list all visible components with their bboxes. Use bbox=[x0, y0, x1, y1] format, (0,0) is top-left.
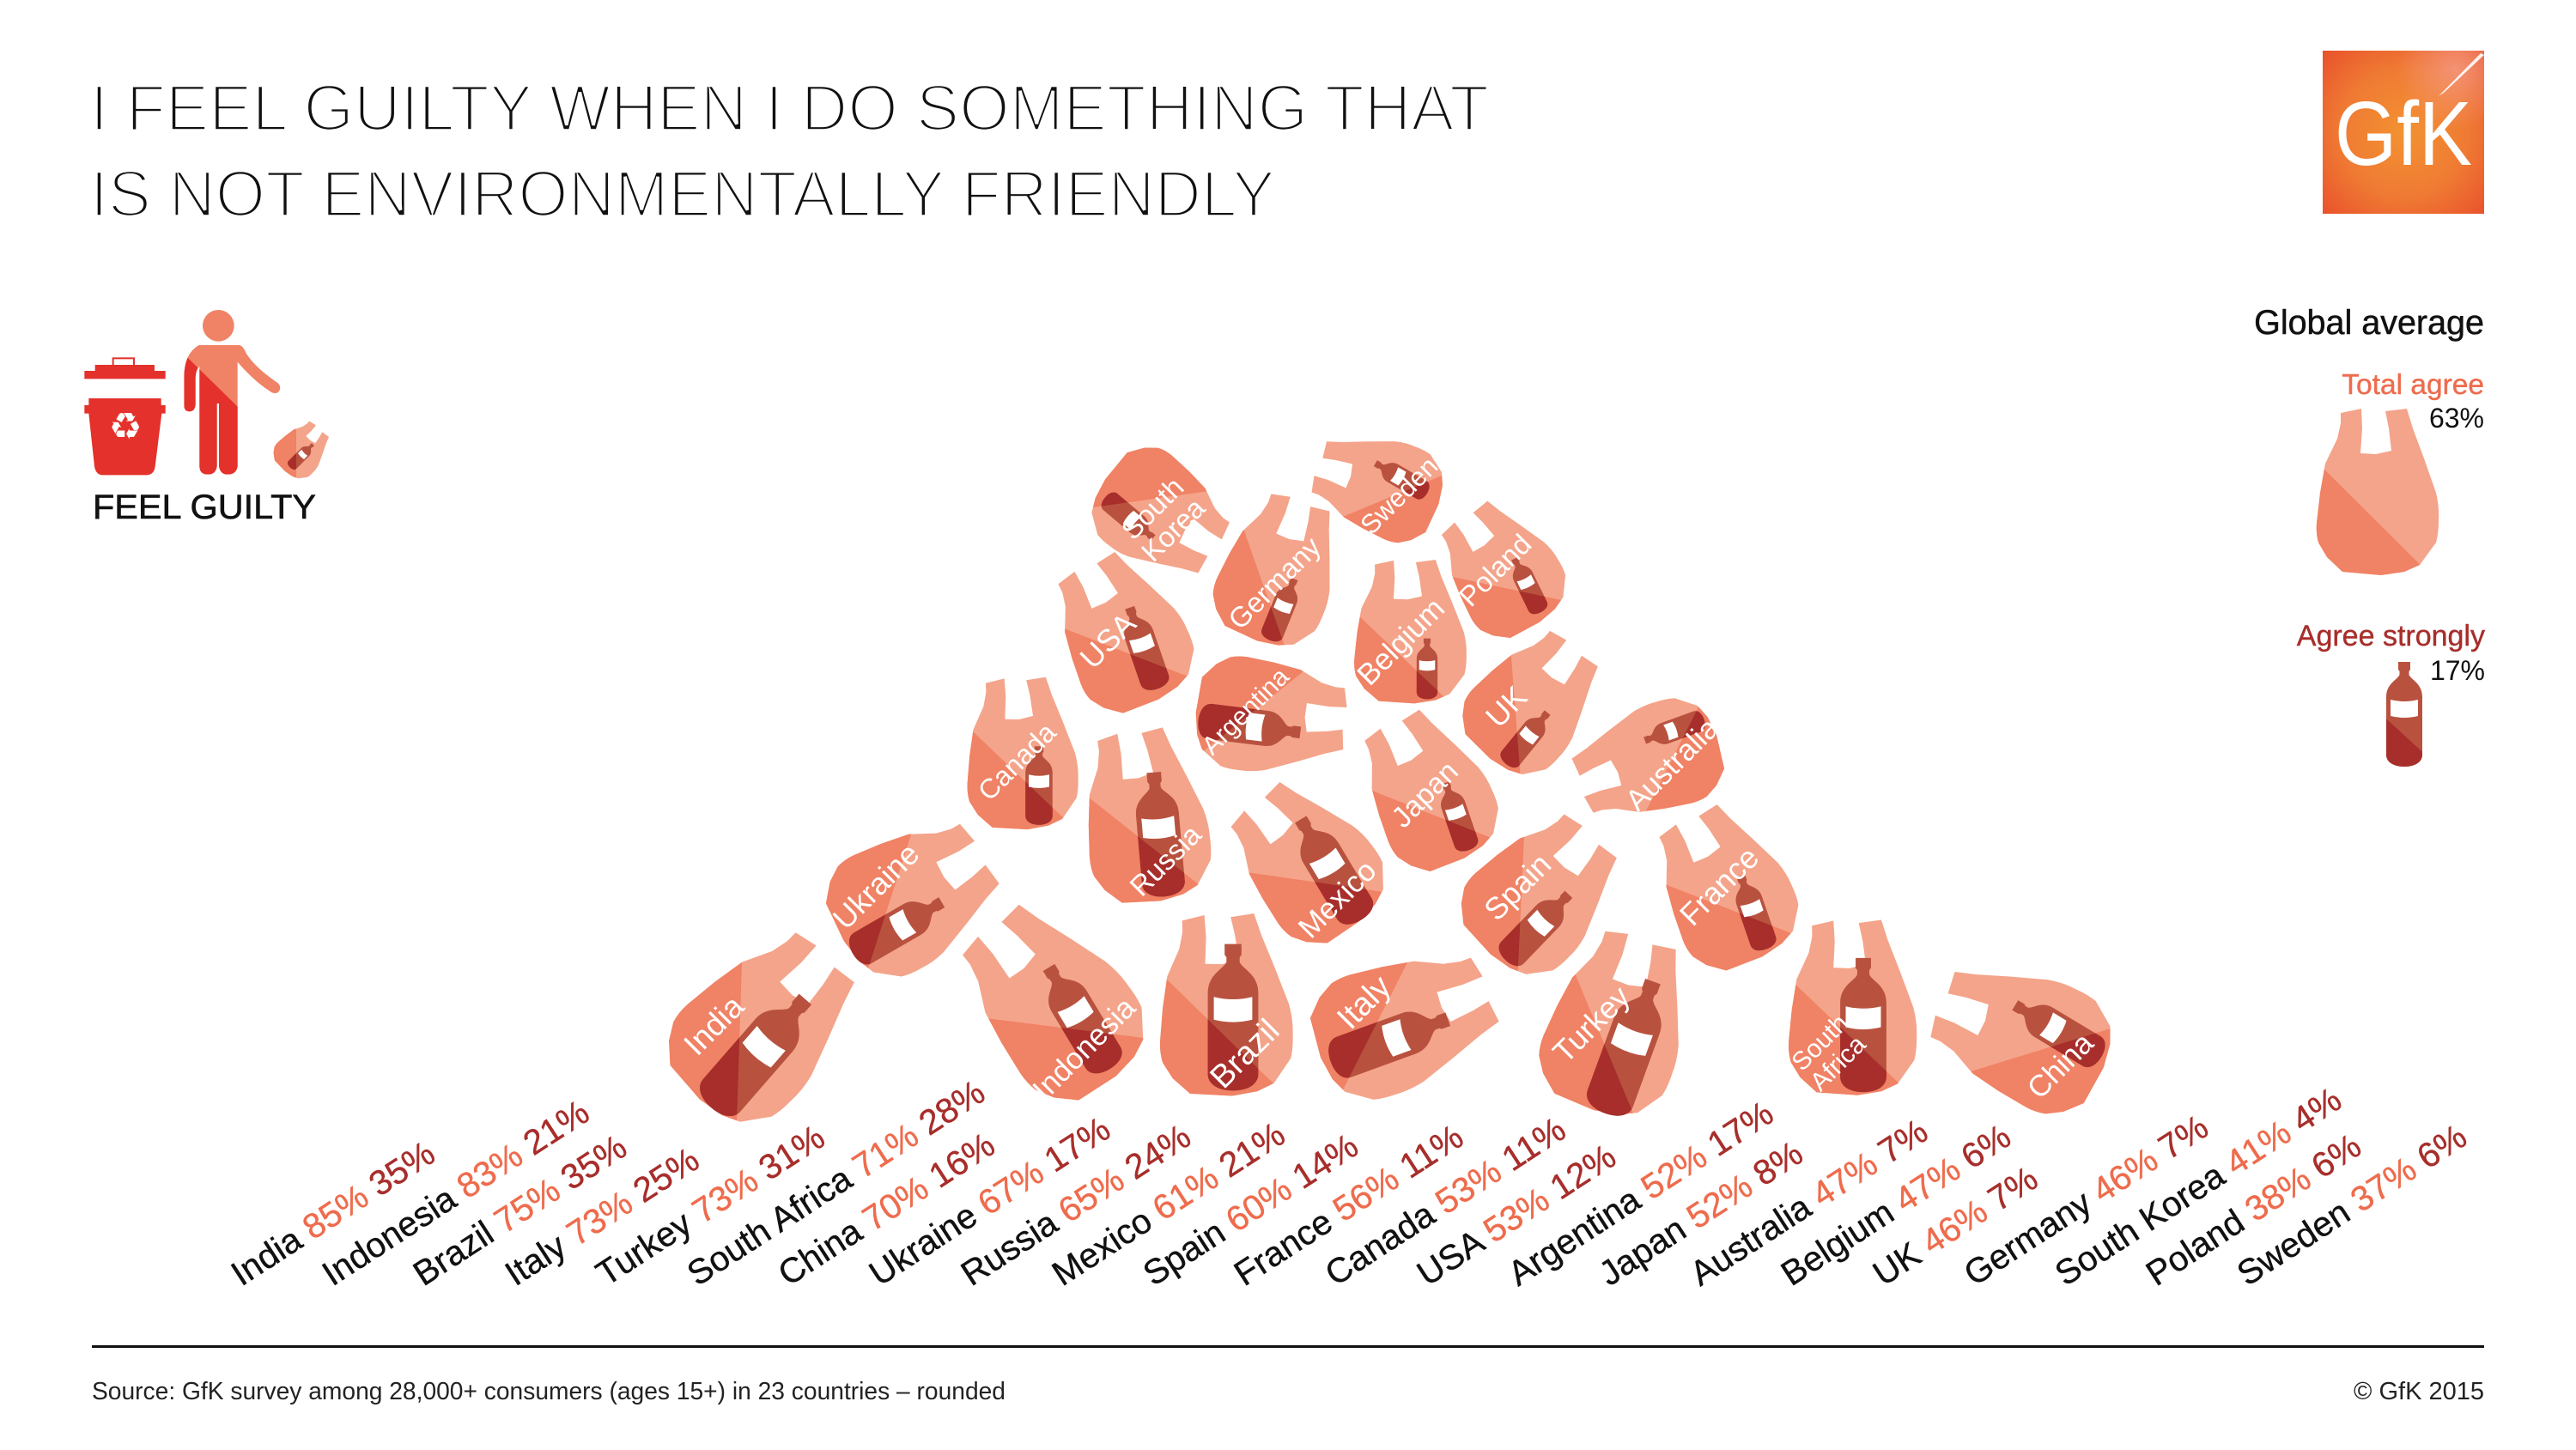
bag: China: China bbox=[2020, 1026, 2100, 1106]
bag: Turkey bbox=[1539, 931, 1679, 1116]
bag: France bbox=[1659, 804, 1798, 970]
bag: China bbox=[1930, 972, 2111, 1114]
row: Australia: Australia 47% 7% bbox=[1683, 1111, 1935, 1294]
bag: Russia: Russia bbox=[1123, 818, 1207, 902]
title: I FEEL GUILTY WHEN I DO SOMETHING THAT bbox=[90, 72, 1489, 145]
title bbox=[90, 72, 1489, 231]
row: UK: UK 46% 7% bbox=[1866, 1158, 2044, 1294]
row: Italy: Italy 73% 25% bbox=[498, 1139, 706, 1294]
bag: Argentina: Argentina bbox=[1197, 662, 1295, 761]
icon: recycling bin bbox=[84, 358, 166, 475]
legend: bottle icon bbox=[2386, 662, 2422, 767]
bag: India: India bbox=[677, 988, 750, 1062]
row: Sweden: Sweden 37% 6% bbox=[2230, 1116, 2474, 1294]
legend: agree strongly value: 17% bbox=[2430, 655, 2485, 686]
bag: Russia bbox=[1089, 727, 1211, 903]
bag: Brazil: Brazil bbox=[1203, 1012, 1286, 1095]
bag: Spain: Spain bbox=[1477, 846, 1558, 927]
row: Argentina: Argentina 52% 17% bbox=[1501, 1093, 1780, 1294]
copyright: © GfK 2015 bbox=[2354, 1378, 2484, 1405]
bag: South Korea: Korea bbox=[1135, 491, 1212, 567]
bag: Canada: Canada bbox=[972, 717, 1062, 807]
bag: South Africa bbox=[1788, 920, 1917, 1095]
bag: Ukraine: Ukraine bbox=[826, 836, 926, 936]
row: Ukraine: Ukraine 67% 17% bbox=[862, 1108, 1117, 1294]
icon: person throwing bag beside recycling bin bbox=[84, 310, 329, 479]
row: Mexico: Mexico 61% 21% bbox=[1045, 1114, 1291, 1294]
bag: Mexico: Mexico bbox=[1292, 854, 1383, 945]
row: South Korea: South Korea 41% 4% bbox=[2048, 1079, 2348, 1294]
bag: Indonesia bbox=[963, 905, 1144, 1101]
bag: Mexico bbox=[1231, 782, 1383, 943]
icon: person bbox=[184, 310, 280, 475]
icon: recycling bin: ♻ bbox=[109, 406, 142, 449]
icon: small bag with bottle bbox=[273, 421, 329, 479]
bag: USA: USA bbox=[1072, 605, 1143, 676]
bag: Japan bbox=[1364, 709, 1498, 871]
bag: India bbox=[669, 932, 854, 1122]
bag: Italy: Italy bbox=[1330, 968, 1398, 1036]
bag: Turkey: Turkey bbox=[1546, 979, 1637, 1070]
bag: Japan: Japan bbox=[1385, 755, 1465, 834]
bag: Germany bbox=[1212, 494, 1330, 646]
bag: UK: UK bbox=[1479, 679, 1534, 734]
row: Russia: Russia 65% 24% bbox=[954, 1116, 1198, 1294]
row: France: France 56% 11% bbox=[1227, 1116, 1470, 1294]
bag: Belgium bbox=[1354, 560, 1467, 704]
bag: Brazil bbox=[1159, 913, 1293, 1095]
bag: Sweden: Sweden bbox=[1354, 451, 1443, 540]
row: USA: USA 53% 12% bbox=[1410, 1136, 1623, 1294]
bag: Sweden bbox=[1312, 441, 1443, 543]
row: South Africa: South Africa 71% 28% bbox=[680, 1071, 992, 1294]
bag: South Korea bbox=[1091, 448, 1230, 573]
bag: Germany: Germany bbox=[1222, 531, 1327, 635]
bag: Spain bbox=[1461, 814, 1617, 974]
title: IS NOT ENVIRONMENTALLY FRIENDLY bbox=[90, 158, 1275, 231]
legend: total agree value: 63% bbox=[2429, 403, 2484, 434]
bag: France: France bbox=[1673, 840, 1765, 932]
row: Belgium: Belgium 47% 6% bbox=[1774, 1116, 2018, 1294]
legend heading: Global average bbox=[2254, 304, 2484, 342]
row: India: India 85% 35% bbox=[224, 1133, 441, 1294]
bag: Australia: Australia bbox=[1619, 711, 1726, 817]
bag: South Africa: Africa bbox=[1805, 1030, 1872, 1096]
row: Spain: Spain 60% 14% bbox=[1136, 1125, 1365, 1294]
row: China: China 70% 16% bbox=[771, 1125, 1002, 1294]
bag: Poland: Poland bbox=[1453, 528, 1537, 612]
row: Poland: Poland 38% 6% bbox=[2139, 1125, 2368, 1294]
row: Turkey: Turkey 73% 31% bbox=[589, 1117, 831, 1294]
bag: Indonesia: Indonesia bbox=[1026, 991, 1142, 1107]
country percentages list bbox=[224, 1071, 2474, 1294]
legend: bag icon bbox=[2317, 409, 2439, 575]
legend: agree strongly label: Agree strongly bbox=[2297, 620, 2485, 652]
bag: South Korea: South bbox=[1115, 470, 1190, 546]
bag: Italy bbox=[1310, 958, 1499, 1100]
heading: feel guilty: FEEL GUILTY bbox=[93, 488, 316, 526]
bag: Argentina bbox=[1195, 656, 1346, 771]
bag: South Africa: South bbox=[1786, 1009, 1854, 1077]
row: Indonesia: Indonesia 83% 21% bbox=[315, 1092, 596, 1294]
bag chart: country bags pile bbox=[669, 441, 2111, 1122]
bag: Australia bbox=[1571, 698, 1724, 813]
row: Canada: Canada 53% 11% bbox=[1318, 1109, 1572, 1294]
legend: total agree label: Total agree bbox=[2342, 369, 2484, 401]
logo: GfK: GfK bbox=[2335, 83, 2472, 185]
bag: Belgium: Belgium bbox=[1351, 592, 1451, 692]
row: Germany: Germany 46% 7% bbox=[1957, 1107, 2215, 1294]
row: Brazil: Brazil 75% 35% bbox=[406, 1126, 634, 1294]
logo: GfK bbox=[2323, 51, 2484, 214]
bag: UK bbox=[1462, 631, 1598, 774]
bag: Canada bbox=[967, 676, 1078, 829]
bag: USA bbox=[1058, 552, 1194, 713]
bag: Poland bbox=[1442, 501, 1566, 638]
bag: Ukraine bbox=[826, 824, 999, 977]
row: Japan: Japan 52% 8% bbox=[1592, 1133, 1809, 1294]
legend: global average bbox=[2254, 304, 2485, 773]
source note: Source: GfK survey among 28,000+ consumers (ages 15+) in 23 countries – rounded bbox=[92, 1378, 1005, 1405]
